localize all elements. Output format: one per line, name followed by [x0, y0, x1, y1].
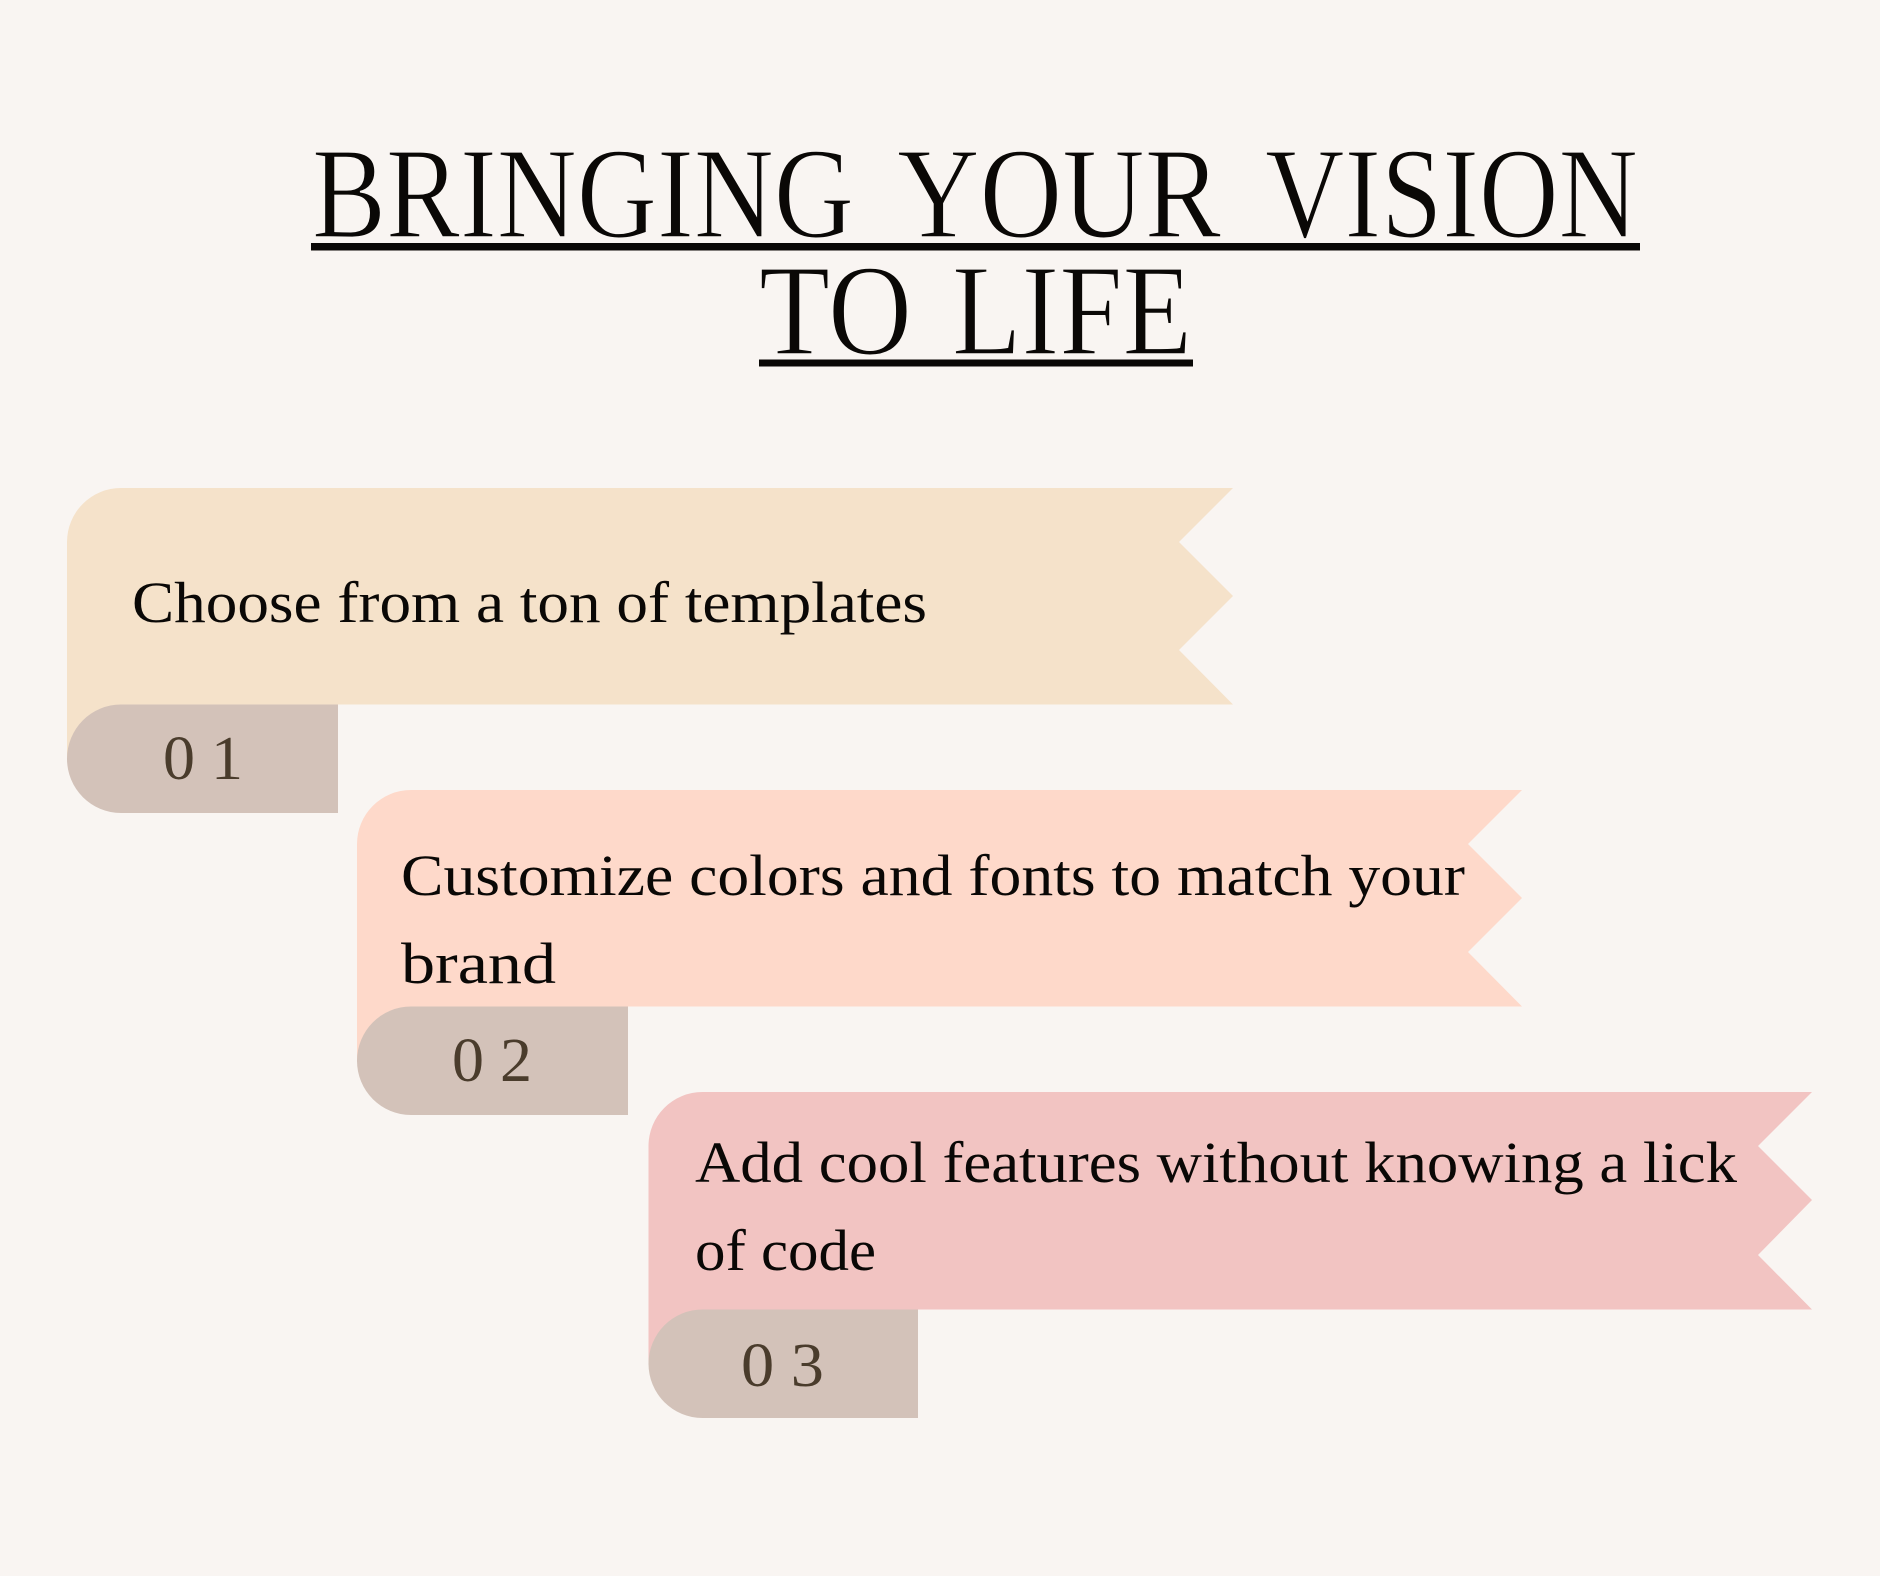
text: step 1: Choose from a ton of templates [132, 570, 927, 635]
badge: 01 [67, 704, 338, 813]
step number 03: 0 3 [741, 1332, 824, 1400]
title: YOUR [897, 122, 1221, 266]
text: step 2: Customize colors and fonts to match your [401, 843, 1465, 908]
panel: step 3 [648, 1092, 1812, 1418]
ribbon: step 1 [67, 488, 1233, 760]
text: step 3: Add cool features without knowing a lick [695, 1130, 1737, 1195]
step number 01: 0 1 [163, 725, 243, 793]
ribbon: step 2 [357, 790, 1522, 1062]
step number 02: 0 2 [452, 1027, 532, 1095]
text: step 2 [401, 843, 1465, 996]
panel: step 2 [357, 790, 1522, 1115]
ribbon: step 3 [648, 1092, 1812, 1365]
badge: 02 [357, 1006, 628, 1115]
title [311, 122, 1640, 383]
text: step 3: of code [695, 1218, 876, 1283]
text: step 2: brand [401, 931, 556, 996]
panel: step 1 [67, 488, 1233, 813]
title: VISION [1265, 122, 1638, 266]
title: BRINGING [312, 122, 854, 266]
title: LIFE [952, 239, 1192, 383]
badge: 03 [648, 1310, 918, 1418]
title: TO [759, 239, 912, 383]
text: step 3 [695, 1130, 1737, 1283]
